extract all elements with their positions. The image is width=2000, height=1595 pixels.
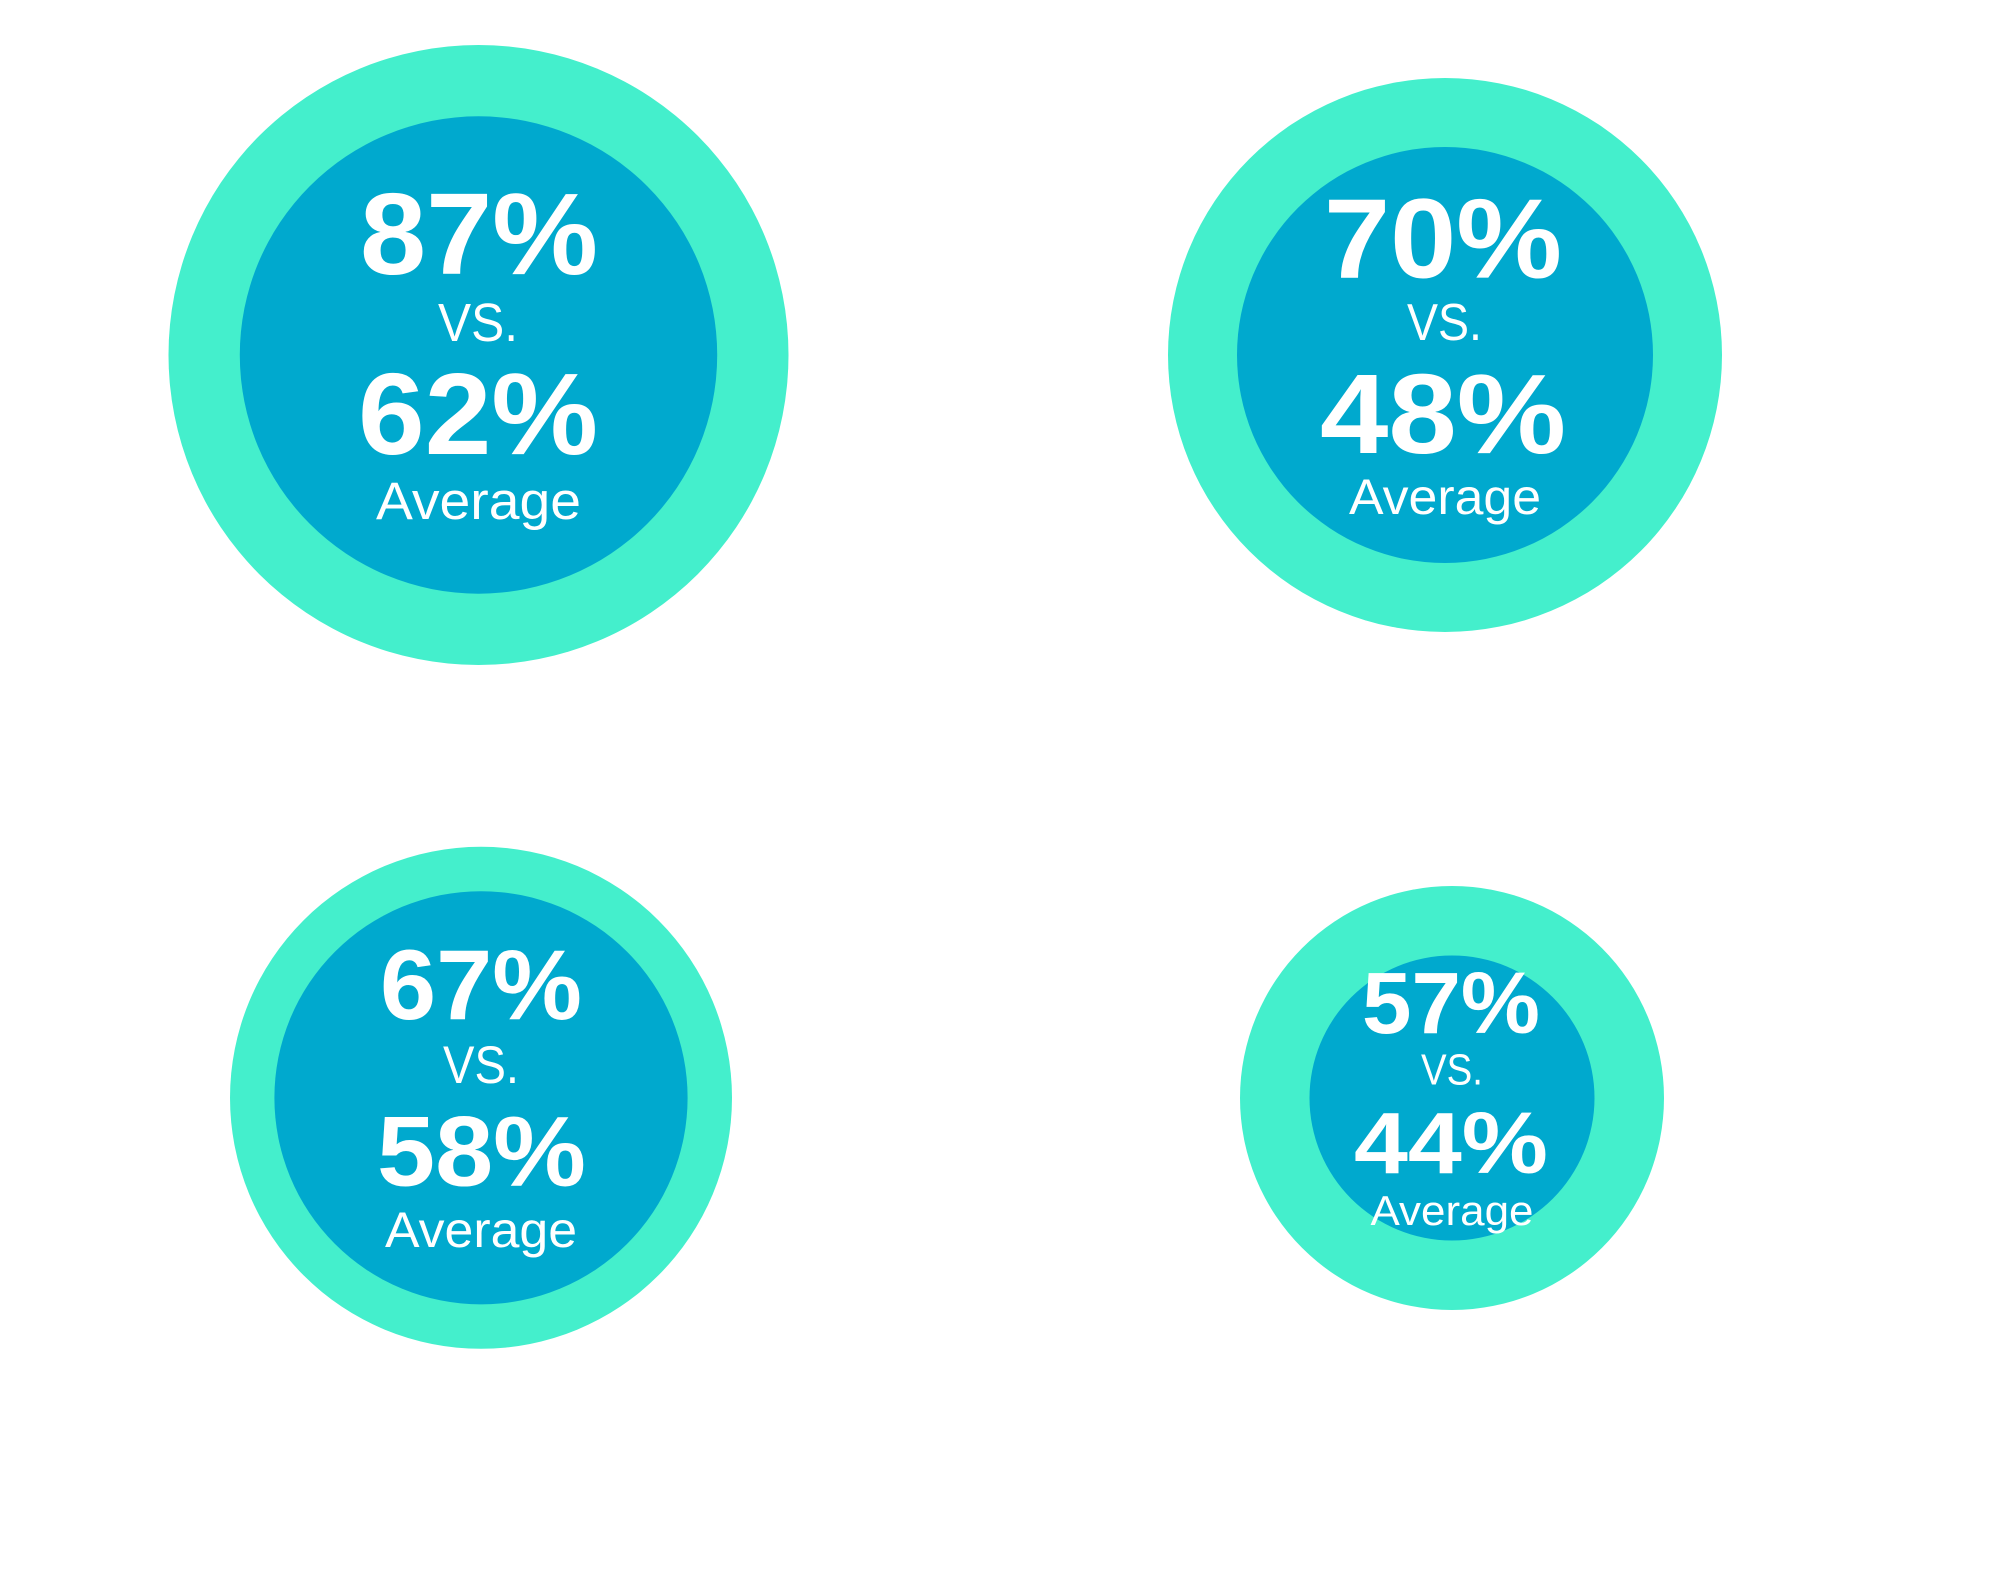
label: VS.: VS. xyxy=(443,1036,519,1095)
label: Average: Average xyxy=(1349,469,1541,525)
stat: 70%: 70% xyxy=(1324,176,1562,302)
inner blue circle xyxy=(240,116,717,594)
panel: 87% vs 62% average xyxy=(168,45,788,665)
label: Average: Average xyxy=(385,1202,577,1258)
outer mint circle xyxy=(168,45,788,665)
stat: 48%: 48% xyxy=(1320,351,1566,477)
outer mint circle xyxy=(1240,886,1664,1310)
stat: 57%: 57% xyxy=(1362,955,1540,1052)
panel: 70% vs 48% average xyxy=(1168,78,1722,632)
label: VS.: VS. xyxy=(1421,1046,1483,1095)
inner blue circle xyxy=(274,891,688,1304)
outer mint circle xyxy=(1168,78,1722,632)
inner blue circle xyxy=(1237,147,1653,563)
stat: 44%: 44% xyxy=(1354,1095,1548,1192)
panel: 67% vs 58% average xyxy=(230,847,732,1349)
label: VS.: VS. xyxy=(438,293,518,353)
label: VS.: VS. xyxy=(1407,294,1482,352)
label: Average: Average xyxy=(376,472,581,531)
stat: 87%: 87% xyxy=(360,169,598,299)
label: Average: Average xyxy=(1370,1187,1534,1234)
stat: 67%: 67% xyxy=(380,929,582,1040)
inner blue circle xyxy=(1310,956,1594,1240)
stat: 58%: 58% xyxy=(377,1096,586,1206)
panel: 57% vs 44% average xyxy=(1240,886,1664,1310)
outer mint circle xyxy=(230,847,732,1349)
stat: 62%: 62% xyxy=(358,349,598,479)
